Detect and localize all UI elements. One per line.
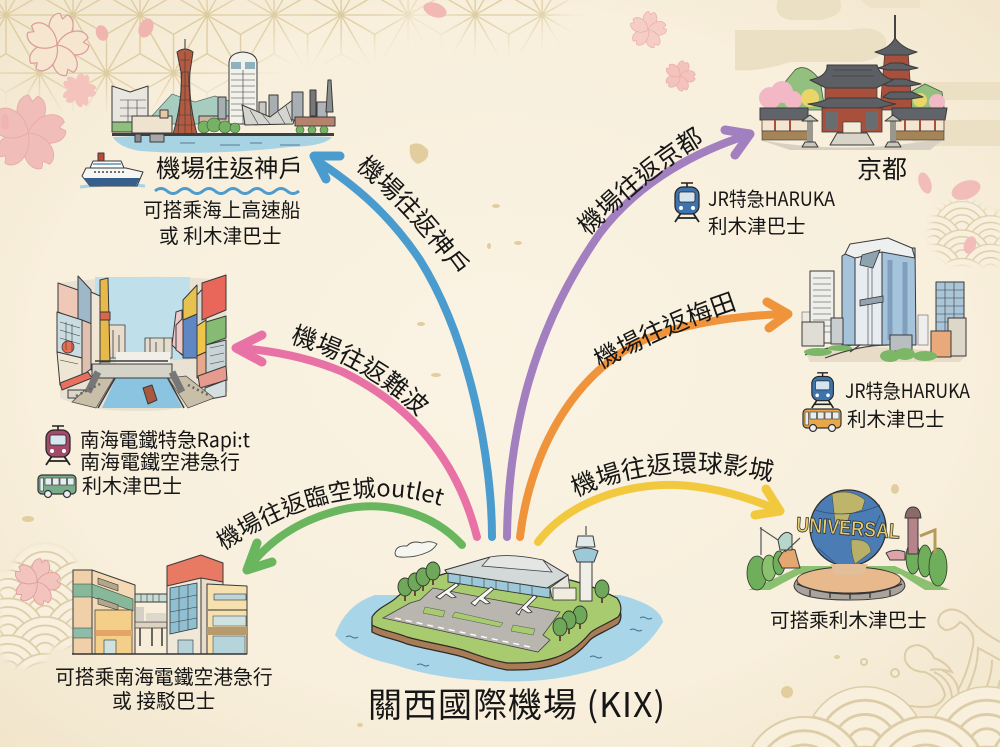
text: Kyoto transport <box>708 183 835 239</box>
illustration: Dotonbori, Namba <box>57 275 228 411</box>
cloud <box>395 542 437 557</box>
text: outlet transport <box>55 661 273 714</box>
background: tan cloud bands top right <box>735 0 1000 146</box>
trees <box>398 562 609 641</box>
illustration: Universal Studios globe <box>747 490 950 600</box>
label: Kyoto: 京都 <box>857 150 907 186</box>
UNIVERSAL sign on globe: UNIVERSAL <box>795 513 901 544</box>
text: Umeda transport: 利木津巴士 <box>847 403 945 432</box>
arrow: airport to Kyoto (purple) <box>507 130 750 537</box>
text: Namba transport: 南海電鐵空港急行 <box>80 446 240 475</box>
text: Namba transport: 南海電鐵特急Rapi:t <box>80 424 250 453</box>
icon: green bus <box>38 475 76 498</box>
illustration: Kyoto temple <box>759 15 947 150</box>
text: Kobe transport: 或 利木津巴士 <box>159 220 282 249</box>
illustration: Rinku outlet <box>72 555 247 654</box>
text: Universal transport: 可搭乘利木津巴士 <box>770 604 927 633</box>
decorative wave under Kobe heading <box>155 188 299 194</box>
text: Umeda transport <box>845 375 970 432</box>
icon: blue train (Umeda) <box>812 373 833 408</box>
text: Kyoto transport: JR特急HARUKA <box>708 183 835 212</box>
text: Kyoto transport: 利木津巴士 <box>708 210 806 239</box>
arrow label: Rinku outlet: 機場往返臨空城outlet <box>216 476 444 550</box>
illustration: Kobe skyline <box>112 39 335 153</box>
arrow label: Namba: 機場往返難波 <box>292 324 430 417</box>
text: Namba transport <box>80 424 250 499</box>
island <box>372 573 621 663</box>
planes <box>436 583 537 615</box>
sea <box>335 595 663 682</box>
background: seigaiha waves bottom right <box>751 686 1000 747</box>
text: outlet transport: 或 接駁巴士 <box>112 685 215 714</box>
text: Namba transport: 利木津巴士 <box>82 470 182 499</box>
arrow: airport to Kobe (blue) <box>314 156 492 537</box>
illustration: Kansai airport island <box>335 526 663 682</box>
arrow: airport to Rinku outlet (green) <box>247 506 462 570</box>
icon: maroon train <box>46 426 70 465</box>
icon: ferry <box>80 153 145 187</box>
arrow: airport to Universal Studios (yellow) <box>538 485 780 542</box>
arrow label: Umeda: 機場往返梅田 <box>594 291 736 370</box>
icon: orange bus (Umeda) <box>803 409 841 432</box>
control tower <box>573 526 598 601</box>
illustration: Umeda Sky Building <box>802 238 966 362</box>
background: seigaiha waves bottom left <box>0 544 78 669</box>
arrow label: Kyoto: 機場往返京都 <box>576 126 702 235</box>
icon: blue train (Kyoto) <box>675 183 699 222</box>
arrow: airport to Namba (pink) <box>236 335 477 537</box>
arrow label: Kobe: 機場往返神戶 <box>357 154 470 272</box>
arrow: airport to Umeda (orange) <box>520 302 788 537</box>
text: Kobe transport <box>143 194 300 249</box>
text: Umeda transport: JR特急HARUKA <box>845 375 970 404</box>
arrow label: Universal Studios: 機場往返環球影城 <box>570 452 774 497</box>
text: outlet transport: 可搭乘南海電鐵空港急行 <box>55 661 273 690</box>
text: Kobe transport: 可搭乘海上高速船 <box>143 194 300 223</box>
background: surging waves bottom right <box>861 609 1000 718</box>
apron and runway <box>383 588 560 652</box>
heading: Kobe: 機場往返神戶 <box>156 150 303 185</box>
terminal <box>448 573 550 598</box>
background: seigaiha waves right edge <box>928 199 1000 266</box>
background: paper stains <box>22 143 899 727</box>
title: Kansai International Airport: 關西國際機場 (KIX) <box>368 678 665 727</box>
